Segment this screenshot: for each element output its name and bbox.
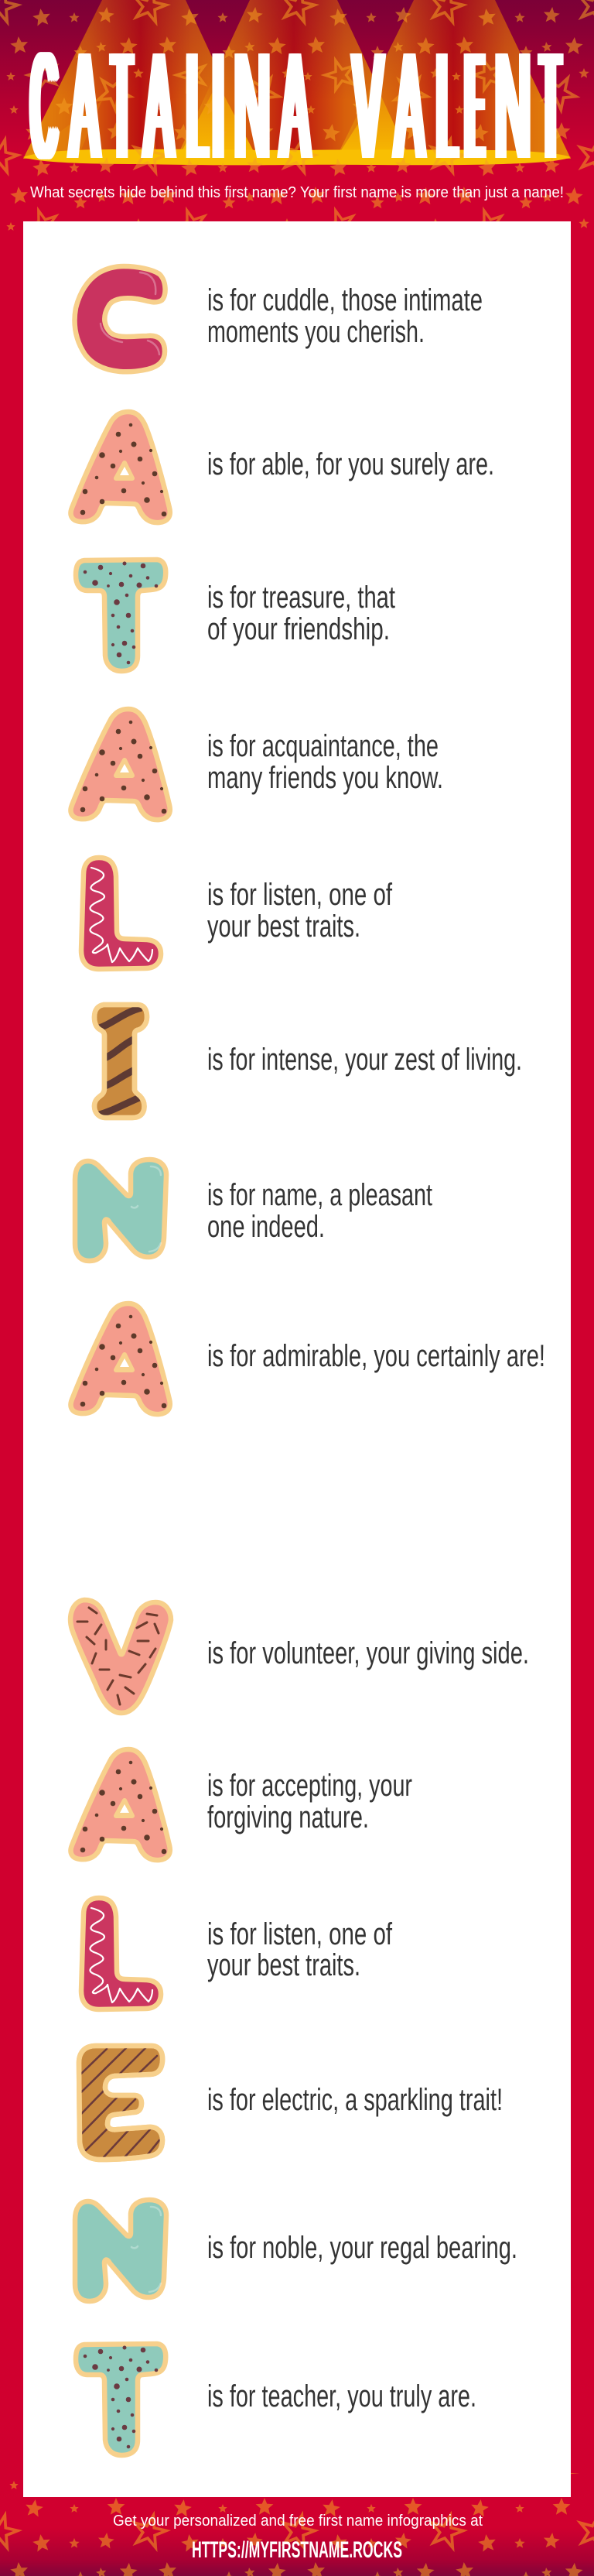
text: L line: your best traits.	[207, 1948, 360, 1982]
title: L	[433, 21, 452, 190]
title	[27, 21, 564, 190]
row: A	[70, 1749, 412, 1860]
spotlights	[0, 0, 594, 165]
text: T line: of your friendship.	[207, 612, 390, 646]
row: N	[75, 1160, 432, 1261]
row: T	[76, 2344, 476, 2455]
text: N line	[207, 1178, 432, 1244]
icon: cookie letter N	[75, 1160, 166, 1261]
text: T line	[207, 581, 395, 646]
title: E	[461, 21, 477, 190]
icon: cookie letter C	[74, 266, 166, 372]
row: A	[70, 1303, 545, 1414]
title: T	[108, 21, 127, 190]
row: I	[94, 1005, 522, 1118]
footer url: HTTPS://MYFIRSTNAME.ROCKS	[192, 2537, 402, 2563]
icon: cookie letter V	[70, 1600, 171, 1713]
title: C	[27, 21, 53, 190]
icon: cookie letter L	[81, 1898, 161, 2009]
title: A	[141, 21, 169, 190]
icon: cookie letter E	[79, 2046, 162, 2160]
subtitle: What secrets hide behind this first name? Your first name is more than just a name!	[30, 184, 564, 201]
title: A	[67, 21, 95, 190]
text: C line: moments you cherish.	[207, 315, 425, 349]
icon: cookie letter A	[70, 1303, 170, 1414]
text: N line: one indeed.	[207, 1210, 325, 1244]
row: T	[76, 560, 395, 671]
icon: cookie letter I	[94, 1005, 147, 1118]
row: L	[81, 1898, 393, 2009]
row: V	[70, 1600, 529, 1713]
footer background	[0, 2469, 594, 2576]
text: L line	[207, 878, 393, 944]
text: A line: is for accepting, your	[207, 1769, 412, 1803]
icon: cookie letter A	[70, 412, 170, 522]
header background	[0, 0, 594, 232]
text: A line: many friends you know.	[207, 761, 443, 795]
row: E	[79, 2046, 503, 2160]
title: N	[491, 21, 527, 190]
title: A	[277, 21, 306, 190]
icon: cookie letter T	[76, 560, 166, 671]
text: C line	[207, 283, 483, 349]
footer text: Get your personalized and free first name infographics at	[113, 2513, 483, 2530]
text: A line: forgiving nature.	[207, 1800, 369, 1834]
icon: cookie letter A	[70, 709, 170, 820]
text: A line	[207, 1769, 412, 1834]
title: N	[230, 21, 267, 190]
text: N line: is for name, a pleasant	[207, 1178, 432, 1212]
text: A line: is for acquaintance, the	[207, 729, 439, 763]
row: A	[70, 709, 443, 820]
icon: cookie letter T	[76, 2344, 166, 2455]
text: L line: is for listen, one of	[207, 1917, 393, 1951]
text: L line	[207, 1917, 393, 1982]
text: T line: is for treasure, that	[207, 581, 395, 615]
title: L	[183, 21, 203, 190]
row: N	[75, 2200, 517, 2301]
text: L line: your best traits.	[207, 909, 360, 944]
row: C	[74, 266, 483, 372]
title: I	[208, 21, 220, 190]
row: L	[81, 858, 393, 969]
text: A line	[207, 729, 443, 795]
title: A	[391, 21, 420, 190]
text: C line: is for cuddle, those intimate	[207, 283, 483, 317]
text: L line: is for listen, one of	[207, 878, 393, 912]
title: T	[537, 21, 555, 190]
icon: cookie letter L	[81, 858, 161, 969]
icon: cookie letter N	[75, 2200, 166, 2301]
text: T line: is for teacher, you truly are.	[207, 2379, 476, 2413]
icon: cookie letter A	[70, 1749, 170, 1860]
title: V	[350, 21, 379, 190]
row: A	[70, 412, 494, 522]
